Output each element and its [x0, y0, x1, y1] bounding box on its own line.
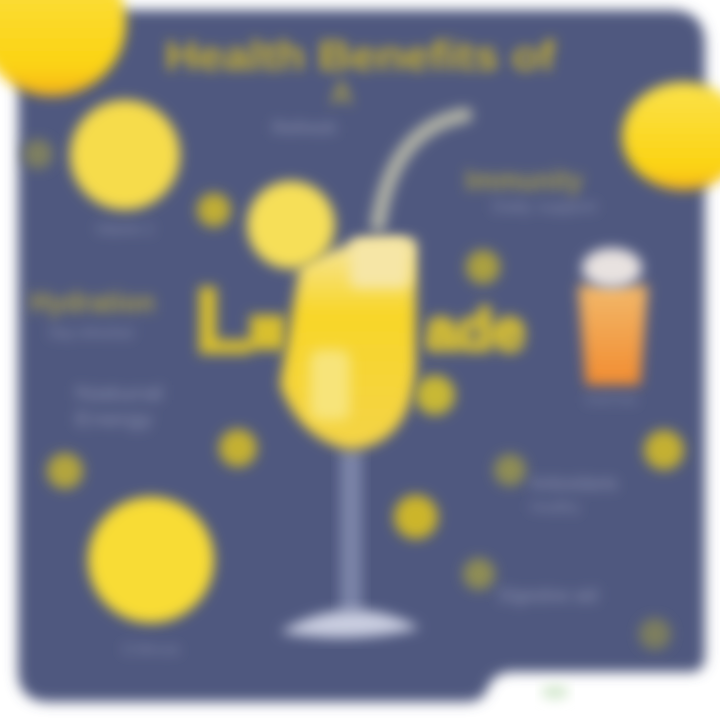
glass base — [280, 610, 420, 638]
ice highlight lower — [310, 350, 350, 420]
subtitle text: Refresh — [272, 118, 337, 138]
caption: lower left lemon: Citrus — [122, 641, 180, 658]
text block: lower right note: Healthy — [530, 499, 580, 516]
text block: left notes: Energy — [75, 409, 153, 431]
icon: small dot lower left — [47, 453, 83, 489]
icon: lemon circle lower left — [88, 497, 214, 623]
icon: lemon circle upper left — [70, 100, 180, 210]
icon: dot far right — [644, 430, 684, 470]
text block: lower right note: Antioxidants — [530, 473, 618, 495]
straw — [378, 115, 465, 225]
illustration: lemonade glass — [247, 115, 465, 638]
text block: right heading — [465, 164, 598, 216]
title: A — [330, 75, 353, 111]
drink lid — [582, 248, 642, 288]
caption: orange drink: Iced tea — [585, 391, 637, 407]
icon: dot bottom middle right — [463, 558, 495, 590]
heading: Lemonade: L — [195, 270, 251, 372]
decorative corner mark — [541, 685, 569, 699]
icon: dot lower left of glass — [219, 429, 257, 467]
text block: lower right note — [530, 473, 618, 516]
glass bowl — [280, 239, 416, 450]
icon: dot beside lemon slice — [197, 193, 231, 227]
title — [165, 32, 556, 111]
lemon slice on rim — [247, 181, 335, 269]
title: Health Benefits of — [165, 32, 556, 79]
icon: dot bottom right — [639, 618, 671, 650]
text block: left heading: Stay refreshed — [48, 325, 133, 342]
heading: Lemonade: ade — [425, 298, 525, 363]
text block: right heading: Daily support — [492, 199, 598, 216]
icon: dot right of glass — [466, 250, 500, 284]
heading: Lemonade — [195, 270, 525, 372]
icon: right lemon — [622, 82, 720, 190]
glass stem — [340, 450, 362, 615]
icon: dot middle right — [494, 454, 526, 486]
text block: left heading — [30, 286, 155, 342]
icon: top-left lemon — [0, 0, 126, 96]
text block: left notes: Natural — [75, 383, 163, 405]
icon: dot lower right of glass — [415, 375, 455, 415]
icon: small dot left — [23, 139, 53, 169]
icon: dot below glass — [394, 495, 438, 539]
text block: left notes — [75, 383, 163, 431]
text block: bottom right note: Digestive aid — [498, 585, 598, 607]
text block: left heading: Hydration — [30, 286, 155, 319]
drink cup — [578, 285, 648, 385]
ice highlight — [350, 238, 410, 288]
icon: orange drink — [578, 248, 648, 385]
text block: right heading: Immunity — [465, 164, 583, 197]
caption: upper left lemon: Vitamin C — [95, 221, 155, 238]
